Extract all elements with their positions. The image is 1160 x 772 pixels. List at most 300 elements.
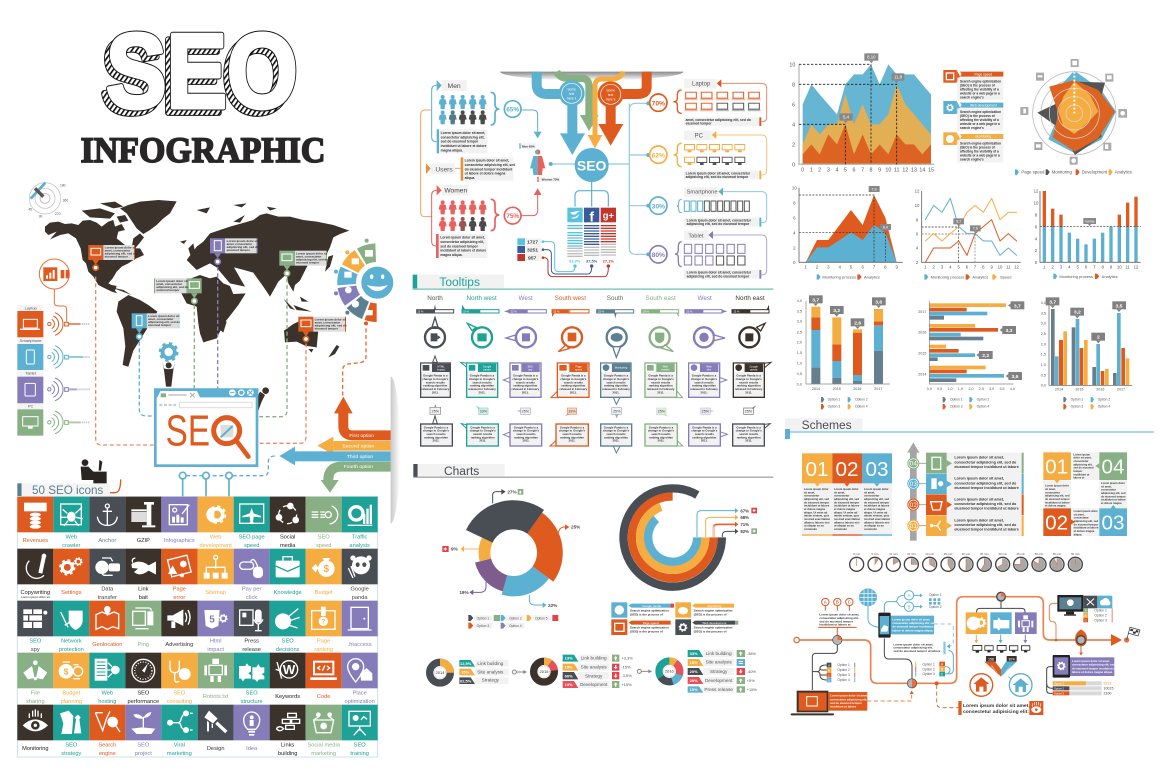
scheme: four squares [1043, 452, 1127, 536]
ring legend: Monitoring: Search engine optimization [694, 609, 732, 613]
line chart: 12 [915, 189, 920, 194]
icon cell: Budget: Budget [315, 590, 333, 596]
scheme: three columns: et dolore magna [864, 507, 885, 511]
horizontal bar chart: 3,3 [1006, 328, 1013, 334]
icon cell: Place optimization [342, 653, 378, 705]
group: Men: Lorem ipsum dolor sit amet, [441, 131, 485, 135]
info tag: Monitoring: search engine's [960, 158, 984, 162]
icon cell: Traffic analysis [342, 497, 378, 549]
tooltip column: South west: change to Google's [559, 429, 585, 433]
step: options tree and laptop: B [828, 668, 830, 672]
icon cell: Page ranking: Page [317, 639, 330, 645]
step: tablet with stats: labore et dolore magna aliqua. [1072, 670, 1113, 674]
icon cell: SEO consulting [161, 653, 198, 705]
bar chart: norma: 0 [1035, 260, 1038, 265]
step: monitor with tiles: C [1085, 618, 1088, 622]
pie step: 2015: Link building [581, 656, 607, 661]
icon cell: Web crawler: crawler [62, 543, 81, 549]
pie step: 2016: 33% [690, 651, 698, 656]
icon cell: Network protection: Network [61, 639, 82, 645]
info tag: Page speed: search engine's [960, 95, 984, 99]
bar chart: norma: 12 [1034, 189, 1039, 194]
icon cell: SEO performance [125, 653, 161, 705]
icon cell: SEO spy: SEO [29, 639, 41, 645]
area chart: main: 2 [792, 142, 795, 148]
tooltip column: South east: crawler [661, 367, 670, 371]
area chart: main: 7 [861, 167, 864, 173]
stacked bar chart: 1,5 [797, 351, 802, 355]
tooltip column: South east: 25% [658, 410, 666, 414]
area chart: main: 6 [792, 102, 795, 108]
tooltip column: South east: Web [663, 365, 668, 368]
stacked bar chart [797, 295, 890, 409]
horizontal bar chart: 3,0 [989, 387, 994, 391]
stacked bar chart: 3,2 [833, 308, 840, 314]
icon cell: Design: Design [207, 746, 224, 752]
panel: browser SEO [154, 388, 258, 466]
group: Women: Lorem ipsum dolor sit amet, [440, 236, 485, 240]
device: laptop [17, 305, 90, 337]
step: globe and phone: Lorem ipsum dolor sit amet, [893, 642, 933, 646]
group: Men: magna aliqua. [441, 148, 463, 152]
scheme: four squares: et dolore magna [1074, 529, 1095, 533]
icon cell: Viral marketing: marketing [167, 751, 192, 757]
pie step: 2016: 2016 [665, 669, 675, 674]
line chart: 7,6 [973, 227, 978, 231]
arrows into SEO: text [569, 92, 574, 96]
scheme: four squares: sit amet, [1045, 487, 1056, 491]
step: tablet with stats: 5213 [1103, 682, 1111, 686]
info tag: Web development [943, 101, 1003, 131]
tooltip column: North: change to Google's [422, 377, 449, 381]
concentric ring chart [623, 488, 757, 587]
heading: Schemes [785, 418, 863, 432]
icon cell: Data transfer [89, 549, 125, 601]
scheme: three columns: ullamco laboris nisi [834, 520, 860, 524]
donut legend: Option 2 [509, 616, 522, 620]
tooltip column: South: 25 % [598, 309, 605, 313]
icon cell: Page ranking: ? [321, 619, 325, 626]
device stat: Smartphone [650, 187, 767, 227]
icon cell: Google panda: panda [352, 595, 368, 601]
group: Users: do eiusmod tempor incididunt [465, 167, 513, 171]
icon cell: Place optimization: optimization [345, 699, 375, 705]
map pin: asia: Lorem ipsum dolor sit [296, 251, 327, 255]
tooltip column: West (right pointing): Web [706, 365, 712, 368]
horizontal bar chart: 2,0 [968, 387, 974, 391]
device stat: PC [650, 131, 767, 179]
device stat: Laptop: eiusmod tempor [686, 122, 712, 126]
tooltip column: North east: Google [749, 365, 758, 368]
panel: 50 SEO icons [17, 483, 378, 757]
tooltip column: West: released in February [511, 387, 540, 391]
icon cell: Link bait [125, 549, 161, 601]
step: A B C text: B [836, 600, 839, 605]
tooltip column: North west: released in February [468, 387, 496, 391]
step: A B C text: sed do eiusmod tempor [819, 619, 854, 623]
area chart: small: 7,9 [871, 187, 877, 191]
icon cell: Budget planning [53, 653, 89, 705]
icon cell: Infographics [161, 497, 198, 544]
line chart: 2 [932, 265, 935, 270]
scheme: four squares: 01 [1045, 456, 1068, 479]
tooltip column: North: ranking algorithm [423, 384, 448, 388]
icon cell: Idea [234, 705, 270, 752]
area chart: small: 6 [861, 265, 864, 270]
icon cell: Social media marketing [306, 705, 342, 757]
tooltip column: South: Monitoring [615, 366, 628, 370]
social bars: g+ [603, 211, 614, 221]
ring legend: Web development: Search engine optimization [694, 626, 732, 630]
bar chart: norma: 8 [1101, 265, 1104, 270]
panel: bar charts row [785, 295, 1132, 432]
grouped bar chart: 4,0 [1041, 301, 1046, 305]
icon cell: Revenues: Revenues [23, 538, 48, 544]
tooltip column: South west: 25 % [553, 309, 560, 313]
grouped bar chart: 3,5 [1116, 303, 1123, 309]
icon cell: Robots.txt [198, 653, 234, 700]
tooltip column: South: Google Panda is a [604, 374, 628, 378]
step: icons and monitors: Option 2 [1004, 664, 1013, 673]
social counters [517, 238, 610, 277]
icon cell: Pay per click: click [246, 595, 257, 601]
step: globe and phone: A [941, 662, 944, 666]
scheme: four squares: incididunt ut labore [1101, 498, 1126, 502]
scheme: four squares: incididunt ut labore [1045, 500, 1070, 504]
tooltip column: North: 2011. [432, 390, 439, 394]
icon cell: Code [306, 653, 342, 700]
area chart: main: 1 [810, 167, 813, 173]
map pin: south america: amet, consectetur [148, 317, 174, 321]
grouped bar chart: 2,5 [1041, 332, 1046, 336]
line chart: 8 [916, 217, 919, 222]
step: tablet with stats: 10015 [1103, 687, 1114, 691]
tooltip column: North: 25 % [417, 309, 424, 313]
scheme: three columns: ut aliquip ex ea [834, 524, 854, 528]
tooltip column: North: search results [426, 432, 446, 436]
clocks row: 40 min [998, 552, 1007, 556]
step: A B C text: consectetur adipisicing elit, [819, 616, 859, 620]
info tag: Monitoring: Search engine optimization [960, 142, 1001, 146]
tooltip column: South: South [607, 295, 624, 302]
radar legend: Analytics [1115, 170, 1132, 175]
tooltip column: South east: released in February [647, 387, 675, 391]
info tag: Monitoring: website or a web page in a [959, 154, 1000, 158]
tooltip column: North east: North east [735, 295, 765, 302]
scheme: three columns: sit amet, [864, 490, 875, 494]
clocks row: 20 min [925, 552, 934, 556]
area chart: small: 10 [792, 186, 797, 191]
tooltip column: South: released in February [602, 387, 630, 391]
map pin: africa: eiusmod tempor [156, 288, 180, 292]
tooltip column: North west: North west [467, 295, 497, 302]
icon cell: Advertising [161, 601, 198, 648]
tooltip column: West (right pointing): Google Panda is a [692, 425, 717, 429]
group: Users: ut labore et dolore magna [465, 172, 505, 176]
tooltip column: South: 25% [613, 410, 621, 414]
bar chart: norma: 9 [1110, 265, 1113, 270]
area chart: main: 10 [885, 167, 891, 173]
ring legend: Web development [675, 619, 738, 635]
map pin: asia: adipisicing elit, sed do [296, 257, 328, 261]
tooltip column: South: change to Google's [603, 429, 629, 433]
icon cell: Traffic analysis: analysis [349, 543, 370, 549]
tooltip column: West: 25% [522, 410, 530, 414]
scheme: timeline arrow: eiusmod tempor incididunt ut labore [954, 465, 1019, 469]
pie step: 2016: 20% [690, 678, 698, 683]
social counters: 3251 [527, 247, 538, 253]
clocks row: 5 min [872, 552, 879, 556]
clocks row: 25 min [944, 552, 953, 556]
social counters: 1727 [527, 240, 538, 246]
device stat: PC: 62% [652, 152, 665, 159]
icon cell: Code: Code [317, 694, 330, 700]
tooltip column: West (right pointing): 25 % [686, 309, 693, 313]
heading: 50 SEO icons: 50 SEO icons [32, 484, 103, 497]
device stat: Laptop [650, 79, 767, 126]
area chart: small: 8,4 [883, 225, 888, 229]
scheme: four squares: Lorem ipsum dolor [1045, 485, 1069, 488]
grouped bar chart: 2 [1097, 335, 1100, 341]
clocks row: 50 min [1035, 552, 1044, 556]
line chart: 6 [966, 265, 969, 270]
stacked bar chart: 2,0 [797, 341, 802, 345]
bar chart: norma: Analytics [1102, 274, 1118, 279]
icon: central person: Women 75% [542, 178, 560, 182]
scheme: three columns: incididunt ut labore [864, 504, 890, 508]
info tag: Monitoring: (SEO) is the process of [960, 146, 996, 150]
bar chart: norma: 6 [1085, 265, 1088, 270]
arrows into SEO: text [608, 93, 613, 97]
map pin: north america: eiusmod tempor [105, 255, 129, 259]
step: tablet with stats [1047, 655, 1116, 696]
step: A B C text [818, 598, 859, 635]
arrows into SEO: Some [606, 89, 615, 93]
scheme: three columns: sit amet, [804, 490, 815, 494]
area chart: small [792, 186, 903, 280]
pie step: 2015: Development [580, 682, 608, 687]
icon cell: Revenues [17, 497, 53, 544]
scheme: three columns: do eiusmod tempor [804, 500, 830, 504]
icon cell: Web development: development [199, 543, 232, 549]
clock nodes [833, 592, 1087, 688]
pie step: 2015: 2015 [540, 669, 549, 674]
area chart: main: 11 [894, 167, 899, 173]
step: A B C text: C [848, 600, 851, 605]
icon cell: Budget planning: $ [64, 667, 69, 677]
icon cell: SEO strategy [53, 705, 89, 757]
grouped bar chart: 1,0 [1041, 363, 1046, 367]
icon cell: Links building: building [278, 751, 297, 757]
tooltip column: South west: ranking algorithm [560, 435, 584, 439]
tooltip column: North: Google Panda is a [423, 374, 448, 378]
clocks row: 60 min [1071, 552, 1080, 556]
ring legend: Web development: (SEO) is the process of [694, 629, 727, 633]
step: monitor with tiles: Option 2 [1094, 613, 1107, 617]
area chart: main: 5 [844, 167, 847, 173]
icon cell: Html impact: Html [210, 639, 221, 645]
icon cell: Links building: Links [281, 743, 294, 749]
scheme: four squares: tempor [1073, 469, 1082, 473]
tooltip column: North: ranking algorithm [424, 435, 448, 439]
step: globe and phone: sed do eiusmod tempor ut labore [893, 649, 941, 653]
icon cell: Copywriting: Copywriting [21, 590, 50, 596]
group: Men: incididunt ut labore et dolore [441, 144, 487, 148]
panel: process scheme [791, 588, 1140, 715]
scheme: timeline arrow: consectetur adipisicing elit, sed do [954, 523, 1017, 527]
map pin: australia: Lorem ipsum dolor sit [315, 317, 346, 321]
tooltip column: North east: 25% [745, 410, 753, 414]
tooltip column: North east: 25 % [733, 309, 740, 313]
radar legend [1015, 169, 1132, 175]
pie step: 2016: 20% [690, 669, 698, 674]
tooltip column: North west: 33% [480, 410, 488, 414]
icon cell: SEO decisions [270, 601, 306, 653]
device stat: Laptop: Laptop [692, 82, 711, 88]
social counters: 957 [528, 255, 537, 261]
tooltip column: South east: Google Panda is a [649, 425, 673, 429]
step: options tree and laptop: A [828, 663, 830, 667]
scheme: timeline arrow [907, 442, 1024, 541]
scheme: four squares: do eiusmod tempor [1074, 522, 1098, 526]
scheme: four squares: sed do eiusmod [1073, 466, 1094, 470]
scheme: four squares: dolor sit amet, [1073, 456, 1092, 460]
pie step: 2016: 10% [690, 660, 698, 665]
step: tablet with stats: Lorem ipsum dolor sit amet, [1072, 659, 1110, 663]
group: Users: aliqua. [465, 176, 475, 180]
scheme: three columns: 02 [836, 458, 858, 481]
scheme: three columns: commodo [864, 527, 877, 531]
step: monitor with tiles: B [1085, 613, 1087, 617]
group: Women: 75% [506, 213, 519, 220]
area chart: main: 8 [792, 82, 795, 88]
pie step: 2014: 2014 [436, 670, 445, 675]
group: Users: consectetur adipisicing elit, sed [465, 163, 515, 167]
scheme: three columns: do eiusmod tempor [834, 500, 860, 504]
pie step: 2016: +5% [747, 678, 755, 683]
icon cell: Network protection [53, 601, 89, 653]
info tag: Web development: website or a web page in a [959, 122, 1000, 126]
area chart: main: 11,8 [894, 75, 903, 80]
tooltip column: North west: Google [483, 365, 491, 368]
stacked bar chart: 2015 [833, 387, 841, 391]
map pin: africa: adipisicing elit, sed do [156, 285, 189, 289]
social bars: f [589, 208, 594, 224]
device: pc: PC [28, 403, 34, 408]
icon cell: Search engine: engine [99, 751, 116, 757]
scheme: three columns: Lorem ipsum dolor [864, 488, 889, 491]
pie step: 2015: +3,3% [621, 656, 633, 661]
icon cell: Pay per click [234, 549, 270, 601]
map pin: asia [279, 251, 328, 276]
pie step: 2015: 13% [565, 656, 573, 661]
scheme: three columns: et dolore magna [804, 507, 825, 511]
group: Women: Women [444, 187, 467, 194]
bar chart: norma: 5 [1076, 265, 1079, 270]
tooltip column: North west: 25 % [463, 309, 470, 313]
scheme: three columns: ut aliquip ex ea [864, 524, 884, 528]
tooltip column: South west: speed [575, 367, 583, 371]
map pin: north america: Lorem ipsum dolor sit [105, 246, 136, 250]
scheme: four squares: 03 [1102, 512, 1124, 535]
icon cell: Knowledge [270, 549, 306, 596]
icon cell: SEO page speed [234, 497, 270, 549]
tooltip column: South east: ranking algorithm [649, 435, 673, 439]
options arrows [279, 397, 391, 493]
tooltip column: South: ranking algorithm [604, 435, 628, 439]
arrows into SEO: here 1 [567, 96, 577, 100]
info tag: Page speed: Page speed [974, 72, 992, 76]
icon: radar satellite: 360 [63, 199, 68, 203]
tooltip column: West: Google Panda is a [513, 374, 538, 378]
area chart: small: 9 [895, 265, 898, 270]
icon cell: Data transfer: Data [101, 587, 113, 593]
tooltip column: South west: released in February [559, 387, 588, 391]
scheme: four squares: consectetur [1074, 516, 1089, 520]
line chart: 7 [974, 265, 977, 270]
heading: Charts [413, 464, 773, 478]
tooltip column: South west: Google Panda is a [560, 425, 584, 429]
scheme: three columns: incididunt ut labore [834, 504, 860, 508]
group: Women: incididunt ut labore et dolore [440, 249, 486, 253]
icon cell: Sitemap [198, 549, 234, 596]
scheme: three columns: commodo [804, 527, 817, 531]
icon: radar satellite: 45 [28, 208, 32, 212]
tooltip column: West (right pointing) [685, 295, 727, 446]
scheme: timeline arrow: Lorem ipsum dolor sit amet, [954, 497, 1004, 501]
step: globe and phone: B [907, 604, 911, 609]
heading: Tooltips [413, 275, 773, 290]
scheme: four squares: incididunt ut labore [1074, 526, 1099, 530]
step: icons and monitors: 158 [988, 657, 994, 661]
SEO hub [549, 101, 650, 256]
step: monitor with tiles: Option 1 [1094, 609, 1107, 613]
icon cell: Robots.txt: Robots.txt [203, 694, 229, 700]
group: Women [432, 185, 542, 258]
horizontal bar chart: 0,5 [937, 387, 942, 391]
tooltip column: West (right pointing): 2011. [701, 439, 708, 443]
device stat: PC: adipisicing elit, sed do eiusmod tempor [686, 175, 749, 179]
tooltip column: South east: search results [651, 432, 671, 436]
icon cell: Viral marketing [161, 705, 198, 757]
clocks row: 10 min [889, 552, 898, 556]
tooltip column: West (right pointing): search results [694, 380, 714, 384]
icon: person holding gear [160, 343, 177, 387]
ring legend: Monitoring: (SEO) is the process of [694, 612, 727, 616]
tooltip column: North west: 2011. [479, 439, 486, 443]
icon cell: Web hosting: Web [102, 691, 113, 697]
scheme: three columns: nostrud exercitation [804, 517, 830, 521]
scheme: three columns: Lorem ipsum dolor [834, 488, 859, 491]
bar chart: norma: 3 [1060, 265, 1063, 270]
tooltip column: West (right pointing): released in February [690, 387, 718, 391]
icon cell: SEO speed: speed [316, 543, 331, 549]
icon cell: Press release: release [242, 647, 261, 653]
grouped bar chart: 0,0 [1041, 384, 1046, 388]
tooltip column: South west: search results [564, 380, 583, 384]
map pin: australia: adipisicing elit, sed do [315, 323, 347, 327]
donut chart [442, 489, 581, 608]
scheme: four squares: et dolore magna [1045, 504, 1066, 508]
scheme: three columns: aliqua. Ut enim ad [804, 510, 828, 514]
group: Users [421, 110, 515, 217]
info tag: Page speed: website or a web page in a [959, 91, 1000, 95]
stacked bar chart: 3,7 [812, 297, 819, 303]
horizontal bar chart: Option 3 [950, 405, 963, 409]
horizontal bar chart: 2016 [918, 331, 926, 335]
grouped bar chart: 2017 [1117, 387, 1125, 391]
ring legend: Page speed: Page speed [643, 621, 659, 625]
